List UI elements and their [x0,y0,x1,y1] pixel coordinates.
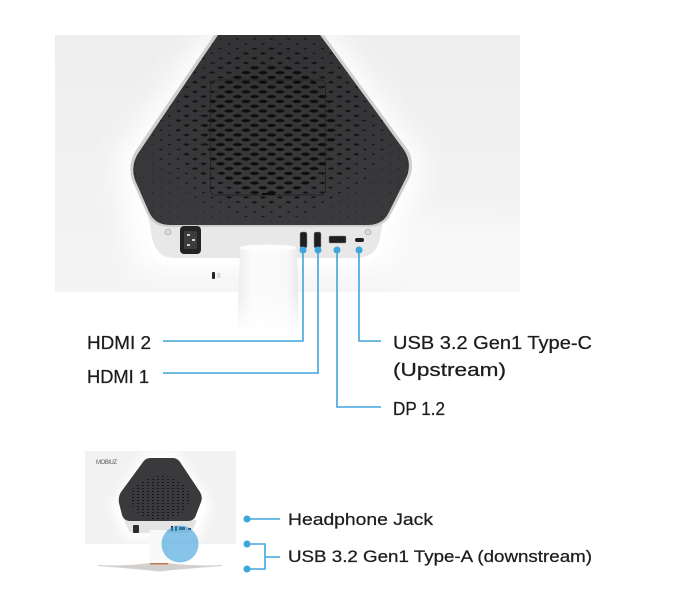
monitor panel [55,35,520,292]
small ports [133,525,191,533]
callout: USB Type-A downstream [244,540,592,572]
main monitor back [55,31,530,335]
stand neck [232,244,304,335]
small monitor panel [85,451,236,544]
USB-C port [355,238,364,242]
callout: USB Type-C upstream [356,246,592,380]
DP port [329,236,346,243]
small stand [98,530,222,572]
small monitor logo: MOBIUZ [96,460,117,466]
callout: USB Type-C upstream: (Upstream) [393,359,506,380]
HDMI 1 port [314,232,321,248]
small rear housing [119,458,202,521]
highlight circle [162,526,198,562]
callout: DP 1.2 [334,246,445,419]
connector tray [143,205,390,265]
small monitor overview [85,451,236,572]
callout: HDMI 2: HDMI 2 [87,332,151,353]
infographic canvas [55,35,592,572]
callout: headphone jack [244,511,434,529]
lock slot [212,272,220,279]
callout: HDMI 1 [87,246,322,387]
callout: USB Type-C upstream: USB 3.2 Gen1 Type-C [393,332,592,353]
callout: DP 1.2: DP 1.2 [393,398,445,419]
small tray [124,520,197,533]
callout: HDMI 2 [87,246,306,353]
callout: HDMI 1: HDMI 1 [87,366,149,387]
power socket [180,226,201,254]
callout: USB Type-A downstream: USB 3.2 Gen1 Type-A (downstream) [288,548,592,566]
rear housing with vents [130,31,415,227]
HDMI 2 port [300,232,307,248]
callout: headphone jack: Headphone Jack [288,511,434,529]
